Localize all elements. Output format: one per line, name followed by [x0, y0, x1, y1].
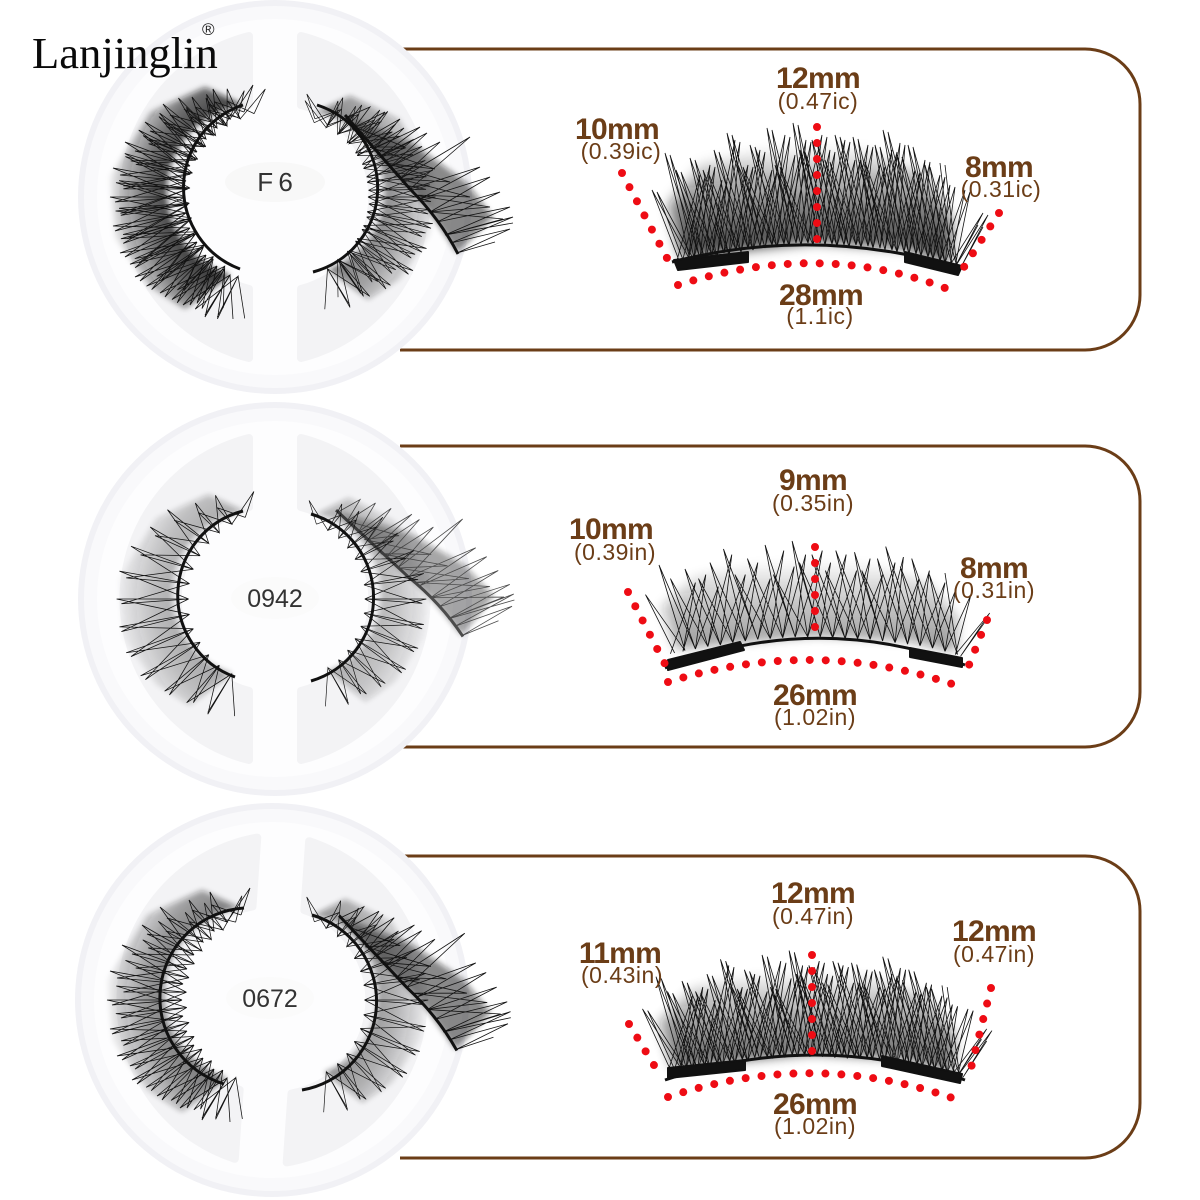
- lash photo: 0942 strip: [645, 541, 990, 670]
- label: width 28mm: 28mm: [779, 279, 863, 312]
- measure dots: 0942: [628, 547, 987, 686]
- label: right length 8mm: 8mm: [960, 552, 1028, 585]
- label: top length 9mm: 9mm: [779, 464, 847, 497]
- left lash: [106, 75, 265, 329]
- label: top length 12mm: 12mm: [771, 877, 855, 910]
- product tray: 0942: [78, 402, 518, 796]
- label: left length 11mm: [579, 937, 663, 988]
- label: top length 12mm: (0.47in): [772, 903, 854, 929]
- label: top length 9mm: [772, 464, 854, 516]
- label: left length 10mm: [569, 513, 656, 565]
- label: width 28mm: (1.1ic): [786, 303, 854, 329]
- label: left length 10mm: (0.39in): [574, 539, 656, 565]
- label: left length 11mm: 11mm: [579, 937, 661, 970]
- label: right length 8mm: [953, 552, 1035, 603]
- label: left length 11mm: (0.43in): [581, 962, 663, 988]
- label: right length 8mm: (0.31ic): [961, 176, 1041, 202]
- label: top length 12mm: 12mm: [776, 62, 860, 95]
- label: left length 10mm: 10mm: [569, 513, 653, 546]
- panel: F6 size chart: [400, 49, 1140, 350]
- product tray: F6: [78, 0, 513, 394]
- model tag F6: F 6: [257, 167, 293, 197]
- label: right length 12mm: [952, 915, 1036, 967]
- label: width 26mm: (1.02in): [774, 704, 856, 730]
- model tag 0672: 0672: [242, 985, 298, 1013]
- label: width 26mm: [773, 1088, 857, 1139]
- label: width 26mm: [773, 679, 857, 730]
- label: left length 10mm: (0.39ic): [581, 138, 661, 164]
- logo: Lanjinglin: Lanjinglin: [32, 28, 218, 78]
- model tag 0672: [226, 977, 314, 1019]
- label: right length 12mm: 12mm: [952, 915, 1036, 948]
- label: left length 10mm: 10mm: [575, 113, 659, 146]
- label: width 28mm: [779, 279, 863, 329]
- model tag 0942: 0942: [247, 585, 303, 613]
- label: top length 12mm: [771, 877, 855, 929]
- label: right length 8mm: [961, 151, 1041, 202]
- panel: 0942 size chart: [400, 446, 1140, 747]
- right lash: [309, 498, 429, 706]
- left lash: [117, 491, 254, 716]
- detached lash strip: [345, 107, 513, 254]
- label: width 26mm: (1.02in): [774, 1113, 856, 1139]
- label: left length 10mm: [575, 113, 661, 164]
- lash photo: 0672 strip: [642, 951, 992, 1083]
- label: right length 8mm: (0.31in): [953, 577, 1035, 603]
- detached lash strip: [335, 485, 518, 648]
- model tag F6: [225, 162, 325, 202]
- label: width 26mm: 26mm: [773, 1088, 857, 1121]
- detached lash strip: [339, 902, 512, 1055]
- label: top length 12mm: [776, 62, 860, 114]
- panel: 0672 size chart: [400, 856, 1140, 1158]
- right lash: [302, 897, 428, 1112]
- model tag 0942: [231, 577, 319, 619]
- label: top length 12mm: (0.47ic): [778, 88, 858, 114]
- measure dots: 0672: [629, 955, 991, 1100]
- right lash: [305, 90, 439, 309]
- logo: Lanjinglin: ®: [202, 20, 215, 39]
- label: width 26mm: 26mm: [773, 679, 857, 712]
- measure dots: F6: [622, 127, 999, 288]
- lash photo: F6 strip: [652, 123, 988, 275]
- product tray: 0672: [62, 790, 512, 1200]
- label: right length 8mm: 8mm: [965, 151, 1033, 184]
- label: right length 12mm: (0.47in): [953, 941, 1035, 967]
- left lash: [107, 888, 261, 1129]
- label: top length 9mm: (0.35in): [772, 490, 854, 516]
